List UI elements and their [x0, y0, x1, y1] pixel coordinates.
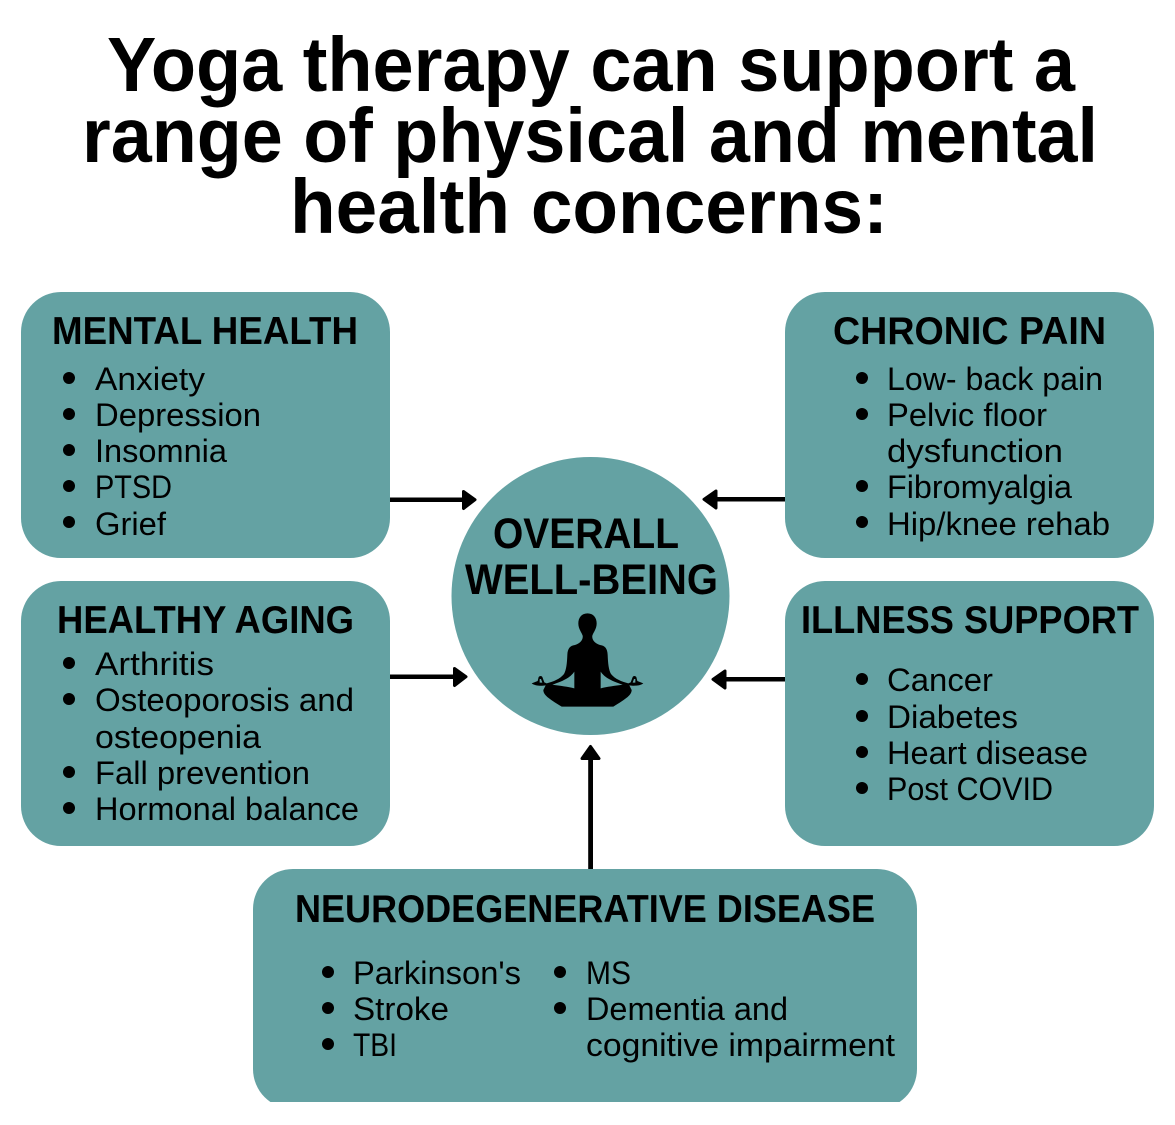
list: mental health items: Anxiety: [95, 361, 205, 397]
list: mental health items: Depression: [95, 397, 261, 433]
list: illness support items: Post COVID: [887, 771, 1053, 807]
heading: mental health: MENTAL HEALTH: [52, 310, 358, 353]
list: illness support items: [856, 662, 1088, 807]
list: neurodegenerative items, left column: [322, 955, 521, 1063]
panel: mental health: [21, 292, 390, 558]
list: neurodegenerative items, right column: MS: [586, 955, 631, 991]
heading: overall well-being: [465, 510, 718, 604]
title: Yoga therapy can support a: [107, 22, 1076, 108]
list: healthy aging items: [63, 646, 359, 827]
list: mental health items: Insomnia: [95, 433, 227, 469]
heading: chronic pain: CHRONIC PAIN: [833, 310, 1106, 353]
title: [82, 22, 1098, 250]
panel: chronic pain: [785, 292, 1154, 558]
list: chronic pain items: Hip/knee rehab: [887, 506, 1110, 542]
panel: overall well-being circle: [452, 457, 730, 735]
list: neurodegenerative items, right column: cognitive impairment: [586, 1027, 895, 1063]
title: health concerns:: [290, 164, 888, 250]
panel: illness support: [785, 581, 1154, 846]
list: mental health items: Grief: [95, 506, 166, 542]
heading: illness support: ILLNESS SUPPORT: [801, 599, 1139, 642]
list: healthy aging items: Fall prevention: [95, 755, 310, 791]
heading: overall well-being: OVERALL: [493, 510, 679, 558]
list: neurodegenerative items, left column: Parkinson's: [353, 955, 521, 991]
panel: healthy aging: [21, 581, 390, 846]
panel: neurodegenerative disease: [253, 869, 917, 1109]
arrow: illness support to overall well-being: [713, 671, 785, 688]
list: mental health items: PTSD: [95, 469, 172, 505]
heading: overall well-being: WELL-BEING: [465, 556, 718, 604]
list: healthy aging items: Arthritis: [95, 646, 214, 682]
list: neurodegenerative items, left column: Stroke: [353, 991, 449, 1027]
heading: neurodegenerative disease: NEURODEGENERATIVE DISEASE: [295, 888, 875, 931]
list: healthy aging items: Osteoporosis and: [95, 682, 354, 718]
title: range of physical and mental: [82, 93, 1098, 179]
list: mental health items: [63, 361, 261, 542]
arrow: chronic pain to overall well-being: [704, 491, 785, 508]
list: chronic pain items: Low- back pain: [887, 361, 1103, 397]
heading: healthy aging: HEALTHY AGING: [57, 599, 354, 642]
list: illness support items: Diabetes: [887, 699, 1018, 735]
icon: meditating figure: [532, 613, 643, 707]
list: chronic pain items: Pelvic floor: [887, 397, 1047, 433]
list: chronic pain items: dysfunction: [887, 433, 1063, 469]
list: chronic pain items: Fibromyalgia: [887, 469, 1072, 505]
list: healthy aging items: Hormonal balance: [95, 791, 359, 827]
list: chronic pain items: [856, 361, 1110, 542]
arrow: healthy aging to overall well-being: [390, 668, 466, 686]
list: illness support items: Cancer: [887, 662, 993, 698]
list: neurodegenerative items, right column: Dementia and: [586, 991, 788, 1027]
arrow: mental health to overall well-being: [390, 492, 475, 508]
list: neurodegenerative items, left column: TBI: [353, 1027, 397, 1063]
list: neurodegenerative items, right column: [554, 955, 895, 1063]
list: illness support items: Heart disease: [887, 735, 1088, 771]
list: healthy aging items: osteopenia: [95, 719, 261, 755]
arrow: neurodegenerative disease to overall well-being: [582, 746, 599, 869]
